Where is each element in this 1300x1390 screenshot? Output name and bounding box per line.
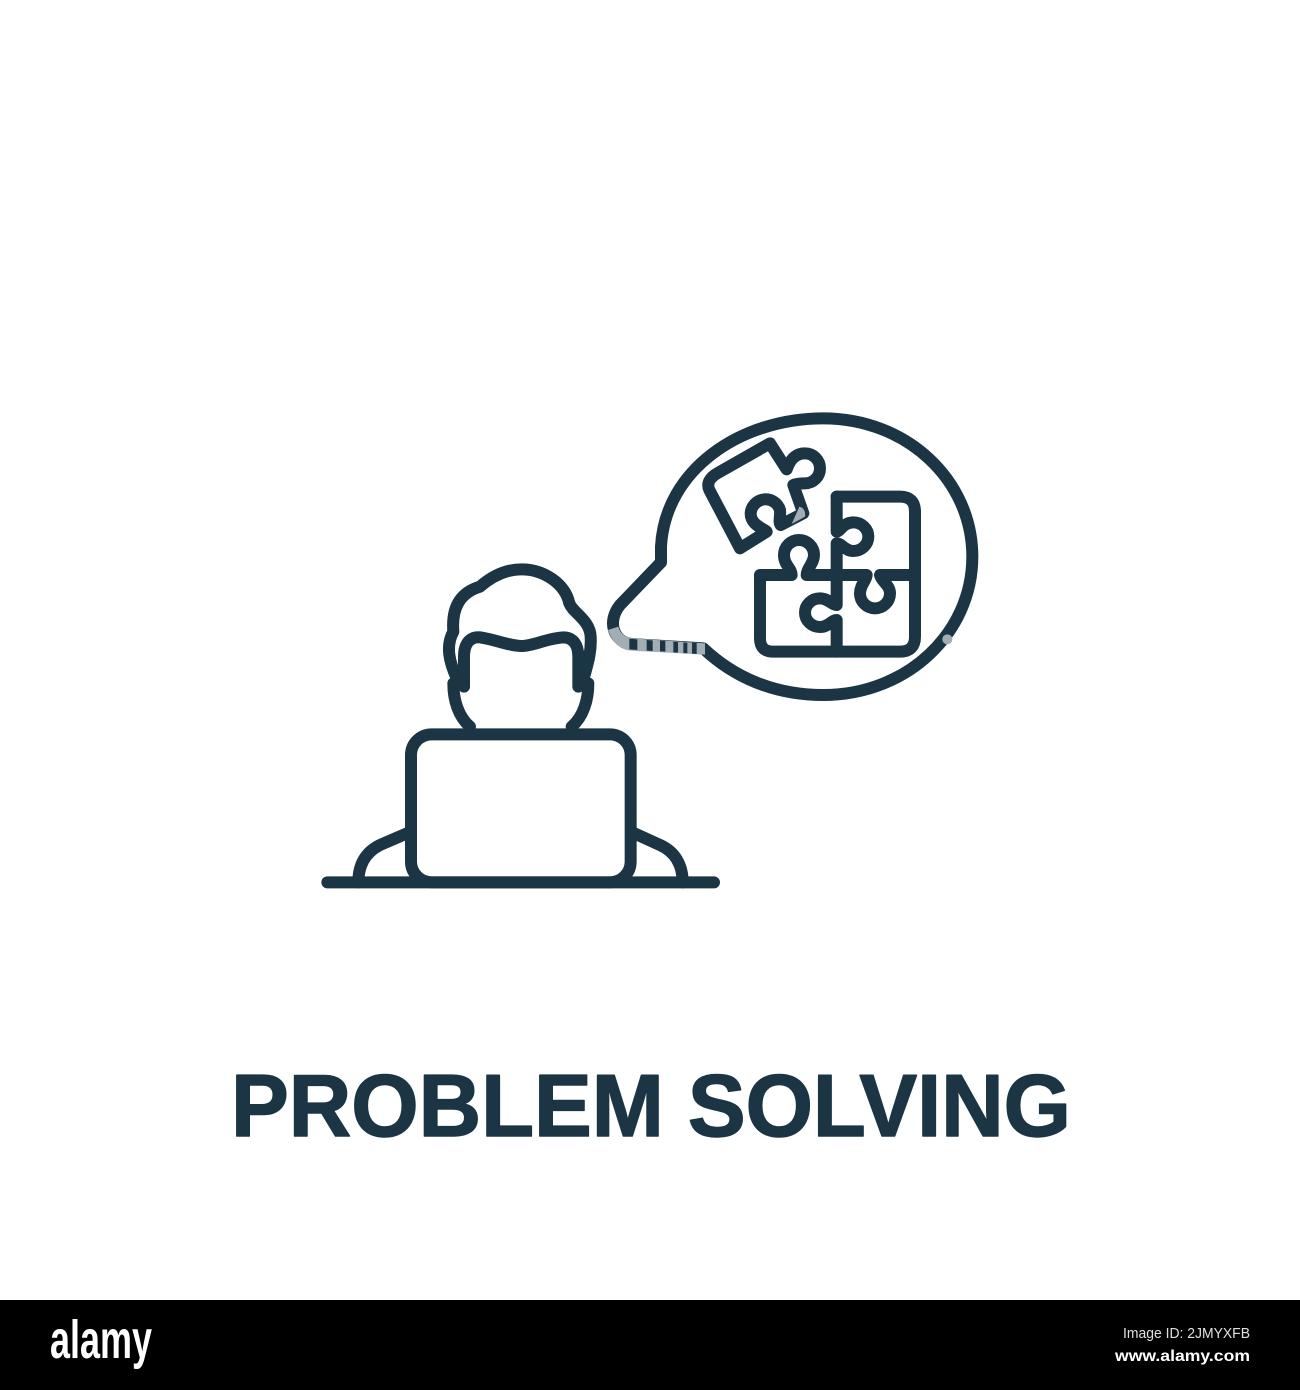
watermark overlay on bubble tail (608, 627, 952, 655)
icon: hair outline (449, 569, 591, 680)
icon: desk line (327, 864, 714, 900)
icon: speech bubble outline (613, 418, 972, 695)
footer logo: alamy (50, 1310, 152, 1370)
icon: right arm (631, 832, 683, 882)
icon: left arm (358, 832, 411, 882)
icon: laptop (411, 734, 631, 882)
icon: loose tilted puzzle piece (708, 443, 820, 548)
footer bar (0, 1300, 1300, 1390)
icon: thought bubble with puzzle pieces (608, 418, 972, 695)
watermark patch on tilted piece (792, 507, 805, 524)
title: PROBLEM SOLVING (231, 1056, 1071, 1155)
icon: person at laptop (327, 569, 714, 882)
icon: hairline (464, 637, 578, 687)
icon: face left edge (453, 683, 470, 727)
footer image id: Image ID: 2JMYXFB (1123, 1325, 1250, 1342)
icon: assembled puzzle vertical seam (805, 497, 868, 652)
icon: assembled puzzle outer frame and horizontal seam (760, 497, 915, 652)
footer url: www.alamy.com (1114, 1348, 1250, 1365)
icon: face right edge (572, 683, 588, 727)
